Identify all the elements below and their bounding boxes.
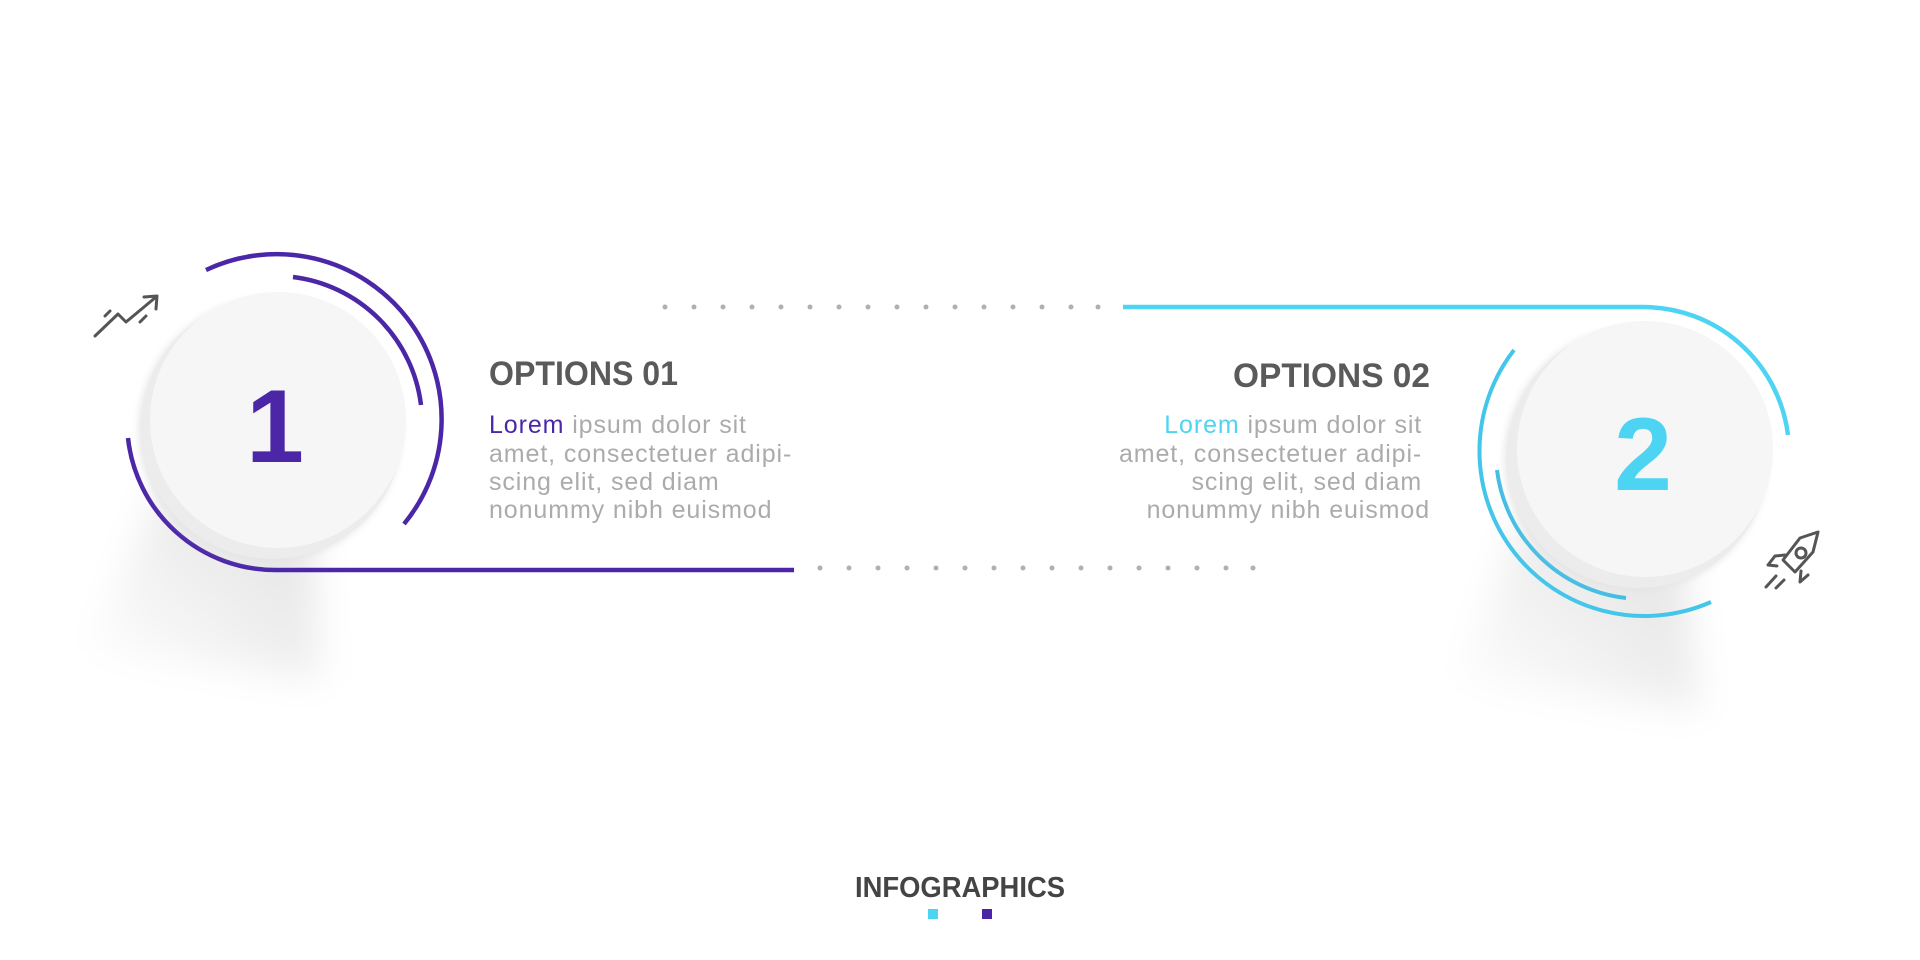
text block: option 1: scing elit, sed diam [489, 468, 720, 496]
footer title: INFOGRAPHICS [855, 872, 1065, 904]
purple bottom arc and line [128, 438, 794, 570]
dotted connector bottom [818, 566, 1256, 570]
text block: option 1: nonummy nibh euismod [489, 496, 772, 524]
footer title [855, 872, 1065, 919]
text block: option 2: scing elit, sed diam [1192, 468, 1422, 496]
text block: option 2: amet, consectetuer adipi- [1119, 440, 1422, 468]
number 2: 2 [1614, 397, 1672, 513]
inner left arc [1497, 470, 1626, 598]
outer arc [206, 254, 442, 524]
icon: rocket [1766, 532, 1818, 588]
shadow 2 [1460, 500, 1700, 710]
icon: trend arrow [95, 296, 157, 336]
disc 2 [1505, 328, 1767, 590]
text block: option 2: OPTIONS 02 [1233, 357, 1430, 395]
step 1: circle with arcs [90, 254, 794, 680]
inner arc [293, 277, 421, 405]
text block: option 1: amet, consectetuer adipi- [489, 440, 792, 468]
number 1: 1 [246, 369, 304, 485]
text block: option 1: OPTIONS 01 [489, 355, 678, 393]
step 2: circle with arcs [1123, 307, 1788, 710]
text block: option 1: Lorem ipsum dolor sit [489, 411, 747, 439]
disc 1 [139, 299, 401, 561]
outer left arc [1479, 350, 1711, 616]
shadow 1 [90, 470, 320, 680]
text block: option 1 [489, 355, 800, 524]
text block: option 2: nonummy nibh euismod [1147, 496, 1430, 524]
footer squares [928, 909, 992, 919]
dotted connector top [662, 304, 1100, 310]
text block: option 2: Lorem ipsum dolor sit [1164, 411, 1422, 439]
cyan top line and arc [1123, 307, 1788, 435]
text block: option 2 [1119, 357, 1430, 524]
